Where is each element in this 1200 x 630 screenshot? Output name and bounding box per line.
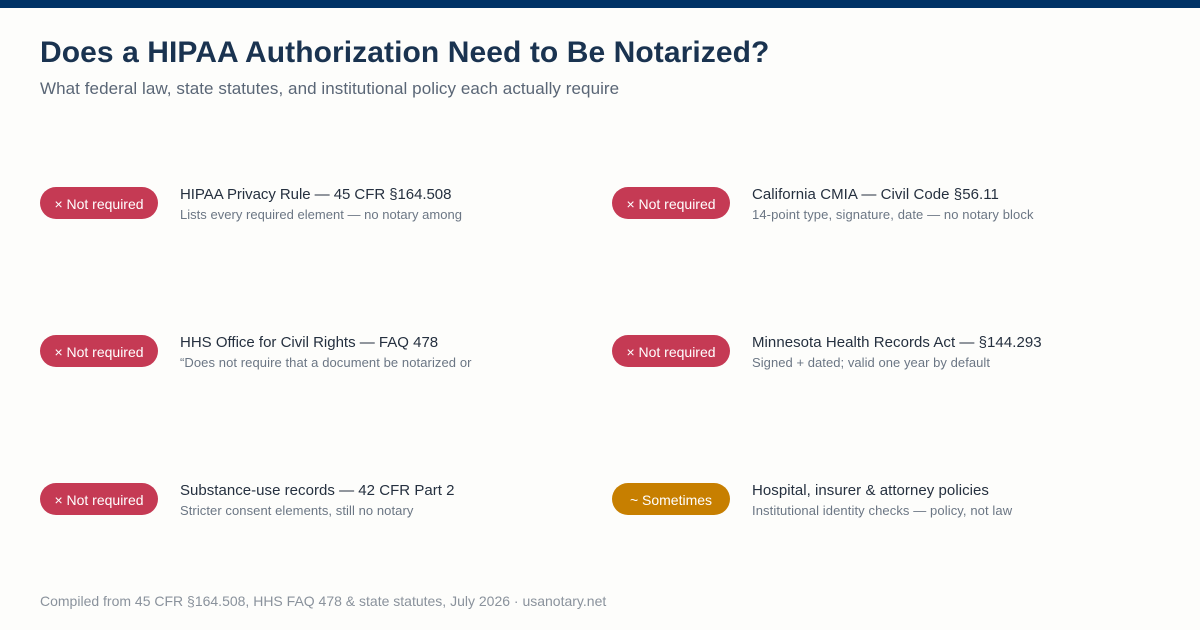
badge: not required — [40, 335, 158, 367]
badge: sometimes — [612, 483, 730, 515]
row detail: “Does not require that a document be notarized or — [180, 355, 472, 370]
row title: Minnesota Health Records Act — §144.293 — [752, 334, 1042, 351]
badge: not required — [40, 187, 158, 219]
subtitle: What federal law, state statutes, and institutional policy each actually require — [40, 79, 619, 98]
row detail: Institutional identity checks — policy, not law — [752, 503, 1012, 518]
badge: sometimes: ~ Sometimes — [630, 492, 712, 508]
title: Does a HIPAA Authorization Need to Be Notarized? — [40, 36, 769, 69]
badge: not required: × Not required — [54, 344, 144, 360]
row title: HIPAA Privacy Rule — 45 CFR §164.508 — [180, 186, 451, 203]
row title: California CMIA — Civil Code §56.11 — [752, 186, 999, 203]
top bar — [0, 0, 1200, 8]
row title: Substance-use records — 42 CFR Part 2 — [180, 482, 455, 499]
footer source note: Compiled from 45 CFR §164.508, HHS FAQ 478 & state statutes, July 2026 · usanotary.net — [40, 593, 606, 609]
row detail: Signed + dated; valid one year by default — [752, 355, 990, 370]
row detail: Stricter consent elements, still no notary — [180, 503, 413, 518]
badge: not required: × Not required — [54, 196, 144, 212]
row: HIPAA Privacy Rule — [40, 186, 462, 222]
row: Hospital, insurer and attorney policies — [612, 482, 1012, 518]
badge: not required: × Not required — [626, 196, 716, 212]
badge: not required: × Not required — [626, 344, 716, 360]
row: HHS Office for Civil Rights — [40, 334, 472, 370]
row title: Hospital, insurer & attorney policies — [752, 482, 989, 499]
badge: not required — [40, 483, 158, 515]
badge: not required: × Not required — [54, 492, 144, 508]
row detail: 14-point type, signature, date — no notary block — [752, 207, 1034, 222]
row detail: Lists every required element — no notary among — [180, 207, 462, 222]
row title: HHS Office for Civil Rights — FAQ 478 — [180, 334, 438, 351]
row: Minnesota Health Records Act — [612, 334, 1042, 370]
badge: not required — [612, 335, 730, 367]
row: California CMIA — [612, 186, 1034, 222]
badge: not required — [612, 187, 730, 219]
row: Substance-use records — [40, 482, 455, 518]
